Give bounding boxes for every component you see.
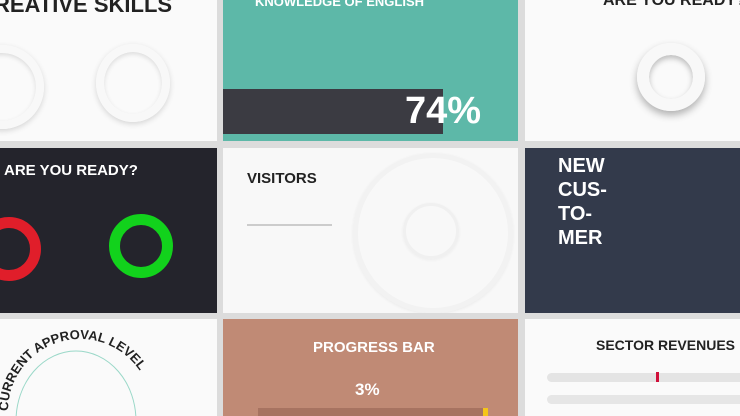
ring left bbox=[0, 45, 44, 129]
panel: are you ready light bbox=[525, 0, 740, 141]
text line bbox=[247, 224, 332, 226]
heading: NEW bbox=[558, 155, 605, 177]
ring right bbox=[96, 44, 170, 122]
heading: CUS- bbox=[558, 179, 607, 201]
bar 2 bbox=[547, 395, 740, 404]
bar 1 bbox=[547, 373, 740, 382]
inner ring bbox=[403, 203, 459, 259]
panel: knowledge of english bbox=[223, 0, 518, 141]
circular heading: CURRENT APPROVAL LEVEL bbox=[0, 330, 144, 410]
panel: current approval level bbox=[0, 319, 217, 416]
heading: TO- bbox=[558, 203, 592, 225]
heading: PROGRESS BAR bbox=[313, 339, 435, 356]
panel: sector revenues bbox=[525, 319, 740, 416]
panel: visitors bbox=[223, 148, 518, 313]
heading: ARE YOU READY? bbox=[4, 162, 138, 179]
heading bbox=[558, 155, 607, 249]
bar bbox=[258, 408, 488, 416]
heading: SECTOR REVENUES bbox=[596, 337, 735, 353]
red ring bbox=[0, 217, 41, 281]
panel: new customer bbox=[525, 148, 740, 313]
bar bbox=[223, 89, 443, 134]
green ring bbox=[109, 214, 173, 278]
decorative rings bbox=[353, 153, 513, 313]
heading: MER bbox=[558, 227, 602, 249]
panel: creative skills bbox=[0, 0, 217, 141]
panel: progress bar bbox=[223, 319, 518, 416]
marker bbox=[656, 372, 659, 382]
ring bbox=[637, 43, 705, 111]
percentage: 74% bbox=[405, 90, 481, 132]
heading: VISITORS bbox=[247, 170, 317, 187]
panel: are you ready dark bbox=[0, 148, 217, 313]
percentage: 3% bbox=[355, 380, 380, 399]
